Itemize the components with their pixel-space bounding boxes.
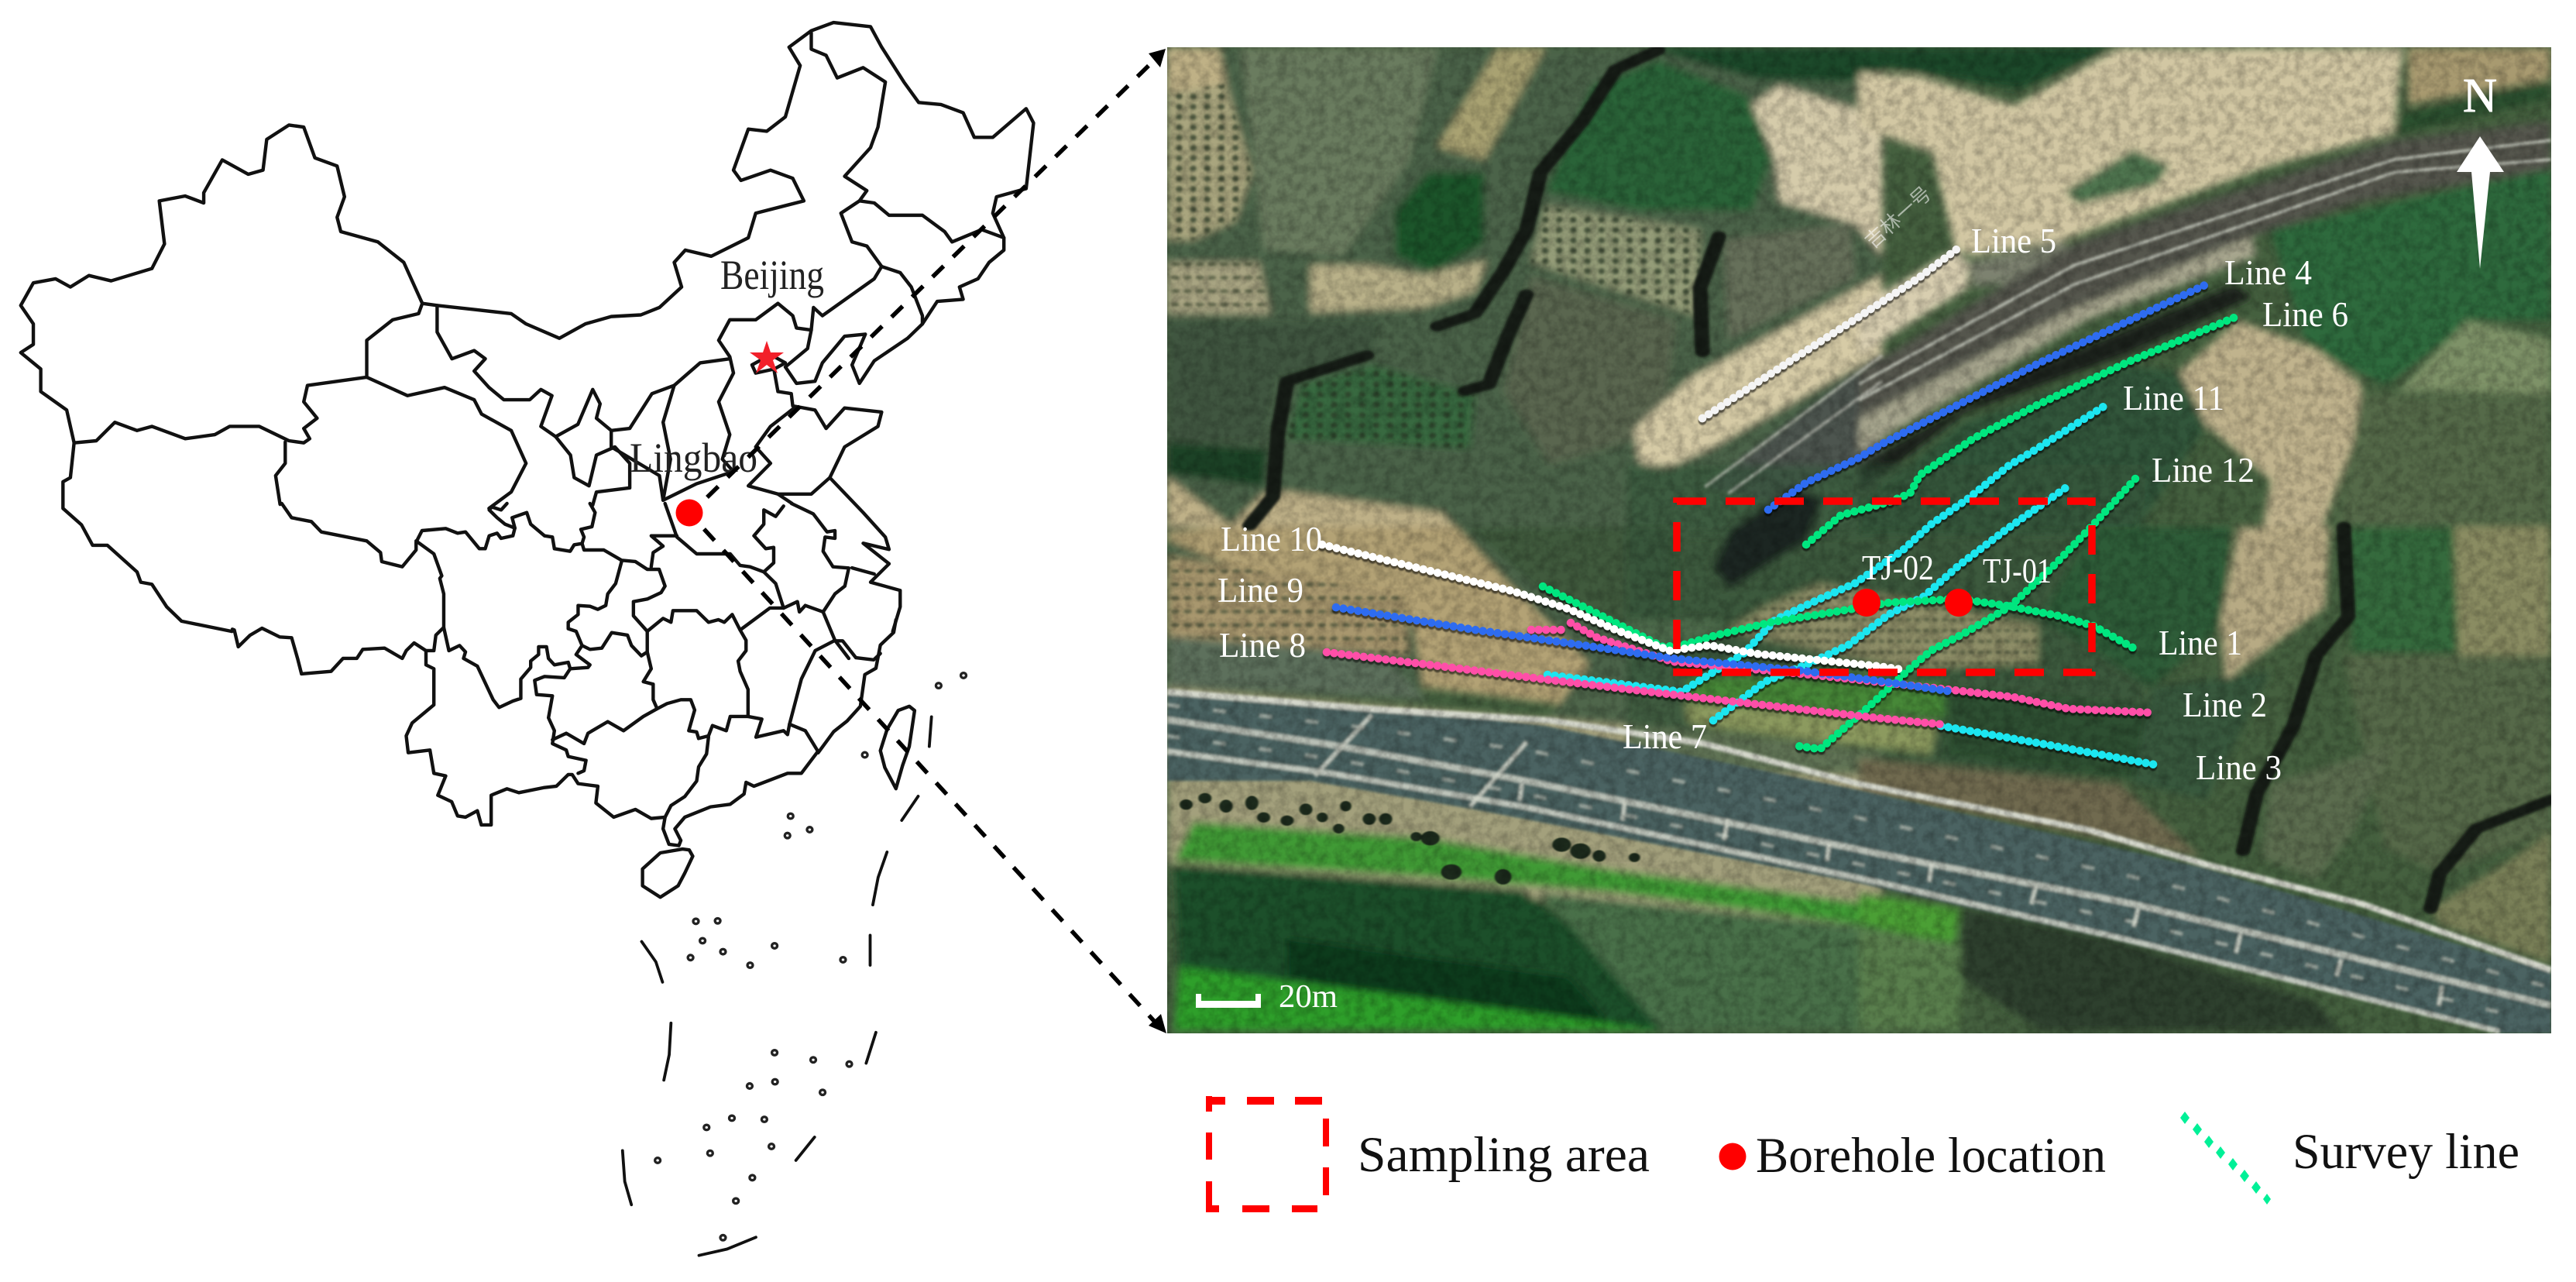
panel: aerial photo [1165, 47, 2551, 1033]
gullies [1249, 50, 2551, 909]
borehole TJ-01 [1945, 589, 1973, 617]
tree clumps beside highway [1180, 793, 1640, 885]
borehole TJ-02 [1853, 589, 1880, 617]
watermark: 吉林一号 [1860, 182, 1935, 253]
north label: N [2463, 70, 2497, 122]
survey line: Line 10 [1322, 545, 1905, 670]
southeast coast, Hainan, Taiwan, and islands [623, 620, 966, 1256]
province boundaries north and west [21, 22, 1033, 631]
highway [1167, 690, 2551, 1033]
label: TJ-01: TJ-01 [1983, 551, 2052, 590]
survey line: Line 7 [1713, 486, 2069, 720]
orchard rows [1167, 84, 2038, 668]
survey line: Line 5 [1702, 249, 1956, 418]
label: Line 4: Line 4 [2224, 253, 2312, 292]
photo terrain [1165, 47, 2551, 1030]
label: Lingbao: Lingbao [630, 435, 757, 481]
legend: survey line swatch [2180, 1112, 2271, 1205]
label: Line 5: Line 5 [1971, 221, 2056, 260]
label: Line 8: Line 8 [1219, 625, 1306, 665]
survey lines [1322, 249, 2236, 765]
legend: sampling area swatch [1206, 1096, 1329, 1212]
legend: sampling area text: Sampling area [1358, 1127, 1650, 1183]
panel: China map [21, 22, 1033, 1256]
province boundaries south [232, 504, 849, 846]
label: Line 11: Line 11 [2123, 378, 2224, 418]
survey line: Line 4 [1768, 284, 2207, 510]
legend [1206, 1096, 2519, 1212]
marker: Lingbao location [675, 499, 703, 527]
survey line: Line 2 [1531, 623, 2152, 713]
icon: north arrow [2457, 136, 2504, 269]
sampling area rectangle [1677, 501, 2092, 672]
survey line: Line 1 [1543, 586, 2138, 651]
scale bar [1196, 994, 1261, 1008]
label: Line 12: Line 12 [2152, 450, 2255, 490]
photo texture [1167, 47, 2551, 1033]
survey line: Line 9 [1336, 607, 1948, 691]
survey line: Line 8 [1327, 652, 1941, 724]
survey line: Line 3 [1941, 726, 2159, 765]
label: Line 2: Line 2 [2183, 685, 2267, 724]
arrow: dashed leader to bottom of photo [704, 529, 1166, 1033]
legend: borehole marker [1719, 1143, 1746, 1170]
label: Line 6: Line 6 [2262, 294, 2348, 334]
survey line: Line 11 [1547, 404, 2108, 692]
label: TJ-02: TJ-02 [1862, 548, 1934, 587]
label: Beijing: Beijing [720, 252, 824, 298]
survey line: Line 6 [1806, 317, 2236, 545]
icon: Beijing star [750, 341, 784, 373]
label: Line 1: Line 1 [2159, 623, 2242, 662]
legend: survey line text: Survey line [2293, 1124, 2519, 1180]
label: Line 3: Line 3 [2196, 748, 2282, 787]
arrow: dashed leader to top of photo [707, 49, 1166, 497]
railway lines [1705, 140, 2551, 493]
label: Line 10: Line 10 [1221, 519, 1322, 559]
scale label: 20m [1279, 979, 1338, 1015]
legend: borehole text: Borehole location [1756, 1128, 2106, 1184]
label: Line 7: Line 7 [1623, 717, 1707, 756]
survey line: Line 12 [1792, 479, 2135, 749]
label: Line 9: Line 9 [1218, 570, 1303, 610]
